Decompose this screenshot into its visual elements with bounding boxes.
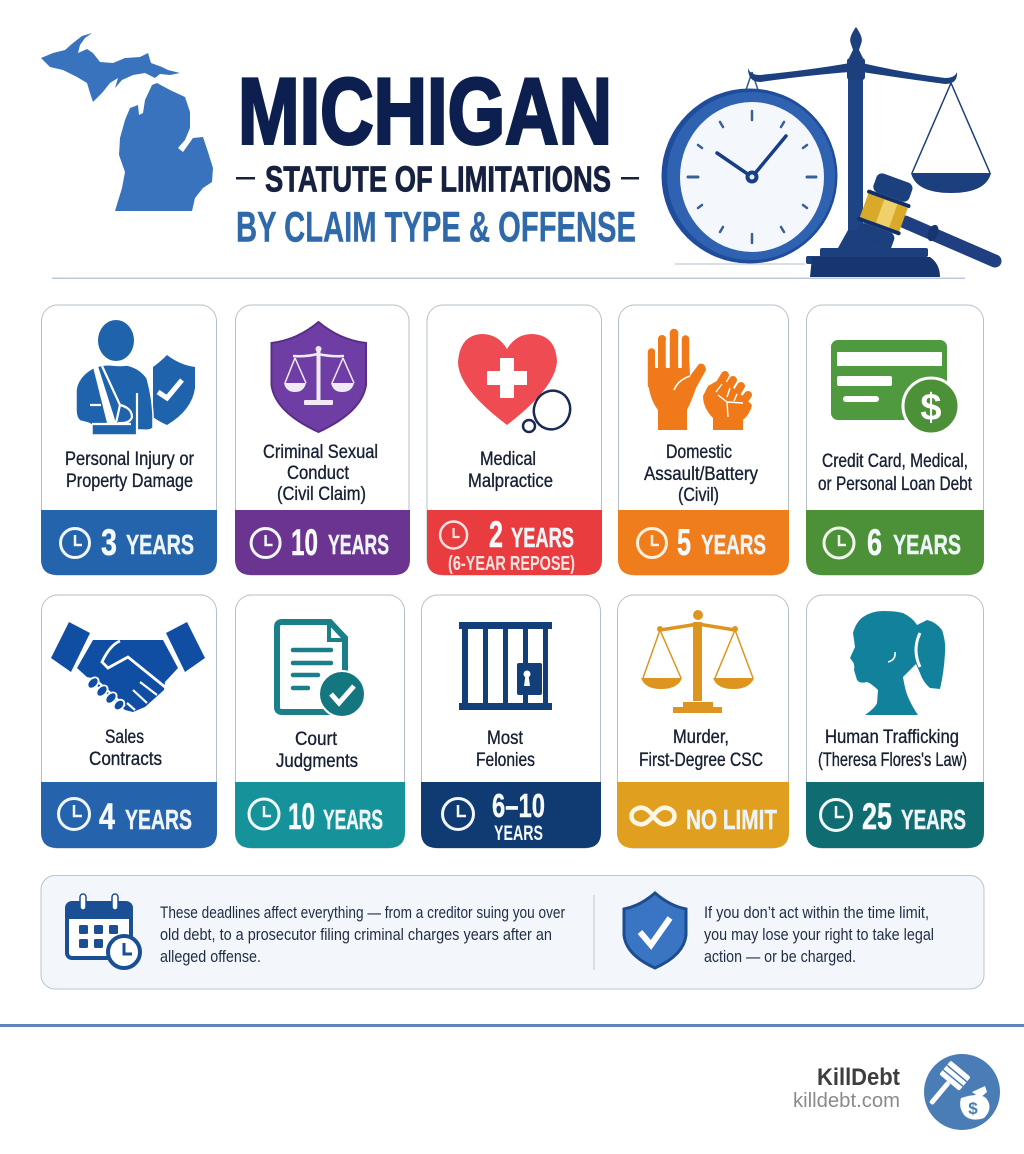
deadline: 5 years: YEARS	[701, 529, 766, 560]
icon: document with check	[277, 622, 365, 717]
deadline: 25 years: YEARS	[901, 804, 966, 835]
label: Human Trafficking	[825, 727, 959, 748]
label	[468, 449, 553, 492]
illustration: clock, scales and gavel	[662, 27, 995, 277]
label	[263, 442, 378, 505]
title: MICHIGAN	[238, 58, 612, 164]
label: Assault/Battery	[644, 464, 758, 485]
card: human trafficking	[806, 595, 984, 848]
label	[65, 449, 195, 492]
label: Credit Card, Medical,	[822, 451, 968, 472]
label: Judgments	[276, 751, 358, 772]
label: Contracts	[89, 749, 162, 770]
footer brand: killdebt.com	[793, 1090, 900, 1112]
card: murder	[617, 595, 789, 848]
deadline: 2 years, 6-year repose: (6-YEAR REPOSE)	[448, 553, 575, 575]
deadline: 5 years	[638, 522, 766, 563]
icon: credit card with dollar: $	[920, 387, 942, 429]
deadline: 4 years: YEARS	[125, 804, 192, 835]
card: criminal sexual conduct	[235, 305, 410, 575]
icon: injured person with shield	[76, 320, 195, 440]
deadline: 25 years	[820, 796, 966, 837]
label: Most	[487, 728, 524, 749]
icon: logo	[921, 1054, 1000, 1130]
text: deadlines: old debt, to a prosecutor filing criminal charges years after an	[160, 926, 552, 944]
label: (Civil)	[678, 485, 719, 506]
card: personal injury	[41, 305, 217, 575]
label	[639, 727, 763, 771]
deadline: 4 years	[58, 796, 192, 837]
deadline: 4 years: 4	[99, 796, 115, 837]
deadline: 10 years	[249, 796, 383, 837]
icon: shield with check	[624, 893, 686, 968]
icon: jail bars with lock	[459, 622, 552, 710]
icon: girl silhouette	[850, 611, 945, 715]
icon: heart with cross and stethoscope	[458, 334, 576, 434]
deadline: 6–10 years: 6–10	[492, 787, 545, 824]
label: Court	[295, 729, 338, 750]
deadline: no limit: NO LIMIT	[686, 804, 777, 835]
text: deadlines: These deadlines affect everything — from a creditor suing you over	[160, 904, 565, 922]
label: Property Damage	[66, 471, 193, 492]
deadline: 6 years	[824, 522, 961, 563]
label: Malpractice	[468, 471, 553, 492]
title: BY CLAIM TYPE & OFFENSE	[236, 204, 636, 252]
icon: open hand and fist	[648, 333, 752, 430]
label: Conduct	[287, 463, 350, 484]
deadline: 5 years: 5	[677, 522, 691, 563]
label	[476, 728, 535, 771]
label	[818, 451, 973, 495]
text: deadlines: alleged offense.	[160, 948, 261, 966]
deadline: 10 years: 10	[291, 522, 318, 563]
icon: calendar with clock	[67, 894, 140, 968]
deadline: 6 years: YEARS	[893, 529, 961, 560]
deadline: 10 years: 10	[288, 796, 315, 837]
card: sales contracts	[41, 595, 217, 848]
label: Murder,	[673, 727, 729, 748]
text: warning: you may lose your right to take legal	[704, 926, 934, 944]
label: Sales	[105, 727, 144, 748]
icon: shield with scales	[272, 322, 366, 432]
label: First-Degree CSC	[639, 750, 763, 771]
text: deadlines	[160, 904, 565, 966]
deadline: 2 years, 6-year repose	[440, 514, 575, 575]
deadline: 6 years: 6	[867, 522, 882, 563]
card: court judgments	[235, 595, 405, 848]
title	[236, 58, 639, 252]
text: warning: action — or be charged.	[704, 948, 856, 966]
deadline: 10 years: YEARS	[323, 804, 383, 835]
icon: logo: $	[968, 1099, 978, 1118]
label	[818, 727, 967, 771]
deadline: 2 years, 6-year repose: 2	[489, 514, 503, 555]
label	[276, 729, 358, 772]
title: STATUTE OF LIMITATIONS	[265, 158, 611, 200]
card: debt	[806, 305, 984, 575]
label	[89, 727, 162, 770]
deadline: no limit	[632, 804, 777, 835]
icon: handshake	[51, 622, 205, 712]
text: warning	[704, 904, 934, 966]
label: Medical	[480, 449, 536, 470]
label: Criminal Sexual	[263, 442, 378, 463]
label: Personal Injury or	[65, 449, 195, 470]
footer brand	[793, 1054, 1000, 1130]
deadline: 3 years: 3	[101, 522, 117, 563]
deadline: 10 years	[251, 522, 389, 563]
icon: gold scales	[641, 610, 754, 713]
label: Domestic	[666, 442, 732, 463]
label: Felonies	[476, 750, 535, 771]
deadline: 2 years, 6-year repose: YEARS	[511, 522, 574, 553]
icon: credit card with dollar	[831, 340, 959, 434]
deadline: 6–10 years	[442, 787, 545, 845]
card: medical malpractice	[427, 305, 602, 575]
deadline: 25 years: 25	[862, 796, 892, 837]
deadline: 3 years: YEARS	[126, 529, 194, 560]
label: (Civil Claim)	[277, 484, 366, 505]
map of Michigan	[41, 33, 213, 211]
deadline: 10 years: YEARS	[328, 529, 389, 560]
footer brand: KillDebt	[817, 1064, 900, 1091]
label: or Personal Loan Debt	[818, 474, 973, 495]
text: warning: If you don’t act within the time limit,	[704, 904, 929, 922]
card: most felonies	[421, 595, 601, 848]
label	[644, 442, 758, 506]
label: (Theresa Flores's Law)	[818, 750, 967, 771]
card: domestic assault	[618, 305, 789, 575]
panel: deadline notes	[41, 876, 984, 989]
deadline: 3 years	[60, 522, 194, 563]
deadline: 6–10 years: YEARS	[494, 822, 543, 845]
